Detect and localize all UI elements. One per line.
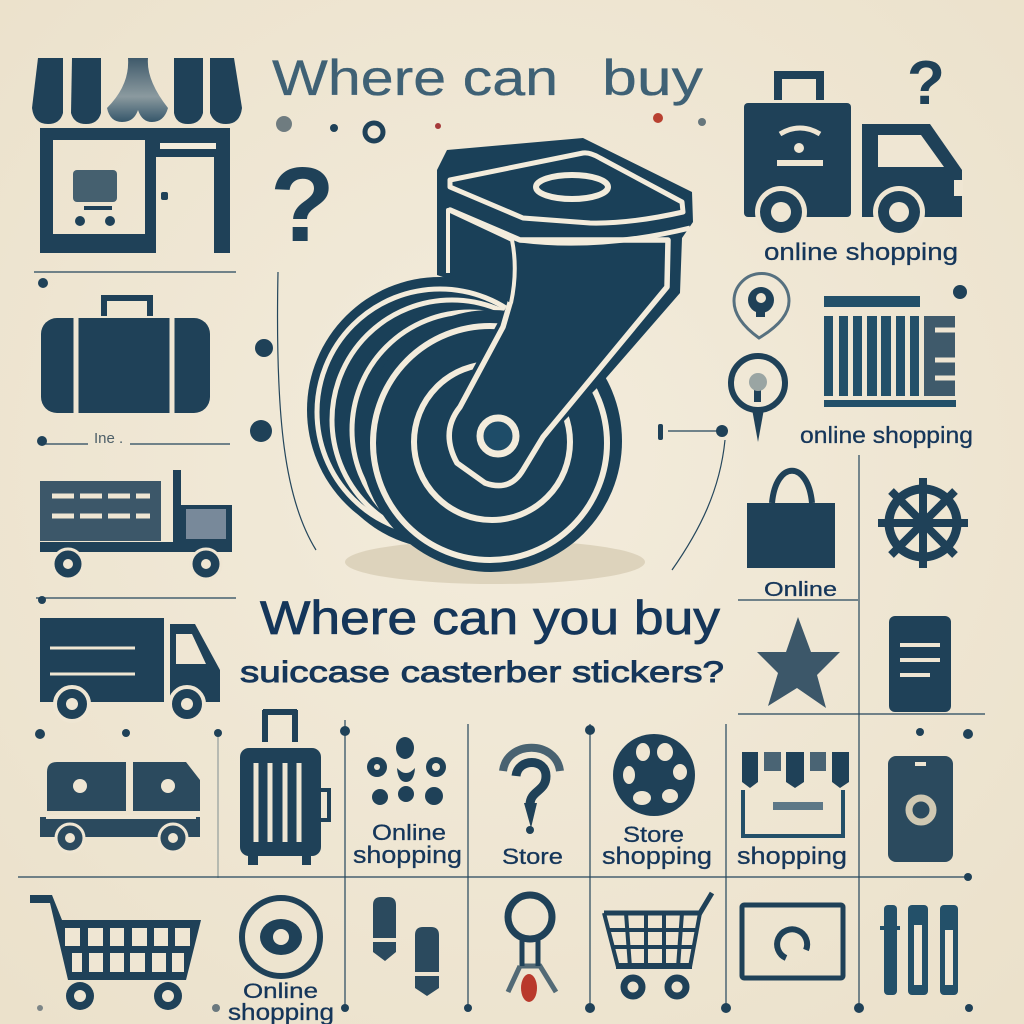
label: online shopping cell: shopping [353,842,462,869]
label: online shopping cell [353,820,462,869]
wheel: layered treads and rings [307,277,622,572]
main icon: caster wheel [307,138,693,584]
heading: main question: Where can you buy [260,591,721,644]
icon: small storefront [742,752,849,836]
icon: shopping cart left [30,895,201,1010]
heading: main question: suiccase casterber stickers? [240,656,724,689]
icon: shopping cart center [604,893,712,996]
icon: two bars [373,897,439,996]
icon: rolling suitcase [240,710,329,865]
heading: main question [240,591,724,689]
icon: question mark top right: ? [907,49,945,118]
title: top heading: Where can [272,50,558,106]
decorative dots under heading [276,113,706,141]
icon: framed screen [742,905,843,978]
icon: suitcase left [41,298,210,413]
icon: delivery truck top right [744,75,963,238]
label: store shopping: shopping [602,843,712,870]
label: store shopping [602,822,712,870]
icon: striped case right [824,296,956,407]
icon: spoked wheel [613,734,695,816]
icon: storefront [32,58,242,253]
icon: gear wheel [878,478,968,568]
icon: document tablet [889,616,951,712]
icon: star [757,617,840,708]
label: store shopping: Store [623,822,684,847]
label: online shopping bottom [228,980,334,1024]
label: ine: Ine . [94,430,123,447]
icon: target ring [242,898,320,976]
label: online shopping cell: Online [372,820,446,845]
label: online shopping bottom: Online [243,980,318,1003]
icon: vertical rails [880,905,958,995]
icon: flatbed truck left [40,470,232,579]
title: top heading: buy [602,50,703,106]
label: online shopping right: online shopping [800,422,973,448]
label: online: Online [764,579,837,601]
bracket: swivel fork with plate [437,138,693,495]
label: store: Store [502,844,563,869]
icon: key pin with red light [508,895,556,1002]
icon: parcel truck [40,762,200,852]
icon: map pins [731,274,789,442]
icon: smartphone [888,756,953,862]
label: shopping: shopping [737,843,847,870]
icon: dots cluster [367,737,446,805]
label: online shopping top right: online shopping [764,239,958,266]
icon: shopping bag [747,471,835,568]
icon: question pin [503,748,560,834]
icon: question mark left: ? [270,146,335,264]
icon: box truck left [40,618,220,721]
title: top heading [272,50,703,106]
